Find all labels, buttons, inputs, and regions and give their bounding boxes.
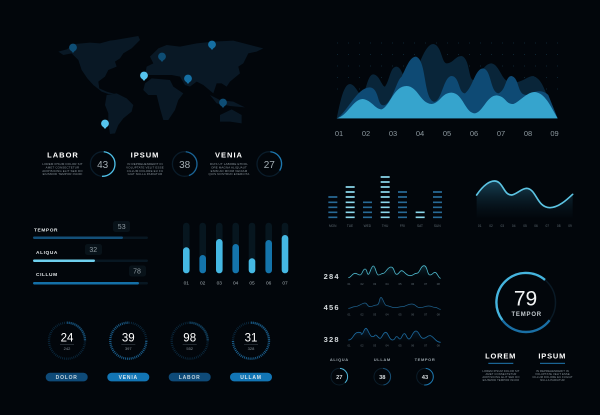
axis 456: 05 bbox=[398, 312, 402, 316]
lorem description: ADIPISICING ELIT SED DO bbox=[482, 375, 520, 379]
underline: lorem bbox=[488, 363, 513, 364]
panel: segmented equalizer chart bbox=[328, 177, 442, 228]
map landmasses bbox=[58, 36, 263, 134]
labor description: ADIPISICING ELIT SED DO bbox=[42, 169, 83, 173]
day labels: MON bbox=[329, 224, 337, 228]
bar labels: 07 bbox=[282, 281, 288, 287]
day labels: FRI bbox=[400, 224, 405, 228]
ring arc: dark bbox=[502, 320, 550, 332]
ipsum description bbox=[532, 369, 573, 382]
panel: world map bbox=[58, 36, 263, 134]
axis 328: 01 bbox=[347, 344, 351, 348]
bar labels: 03 bbox=[217, 281, 222, 287]
day labels bbox=[329, 224, 441, 228]
axis 284: 05 bbox=[398, 282, 402, 286]
dial value: 31 bbox=[245, 332, 257, 344]
panel: ipsum text bbox=[532, 352, 573, 382]
panel: lorem text bbox=[482, 352, 520, 382]
gauge: tempor 43: TEMPOR bbox=[415, 357, 435, 362]
line chart axis labels bbox=[478, 224, 572, 228]
bar labels bbox=[184, 281, 288, 287]
map pin: middle east bbox=[184, 75, 192, 84]
ipsum description: VOLUPTATE VELIT ESSE bbox=[535, 372, 570, 376]
panel: dial ullam bbox=[230, 323, 272, 381]
line chart axis labels: 02 bbox=[489, 224, 493, 228]
labor description: LOREM IPSUM DOLOR SIT bbox=[42, 162, 83, 166]
gauge: tempor 43 bbox=[415, 357, 435, 386]
x axis labels: 03 bbox=[389, 129, 397, 138]
ipsum description bbox=[126, 162, 164, 176]
ring value: 79 bbox=[514, 288, 537, 310]
pill: venia: VENIA bbox=[119, 375, 138, 381]
day labels: WED bbox=[364, 224, 372, 228]
wave 328 bbox=[348, 328, 441, 342]
bar: aliqua 32: 32 bbox=[89, 247, 97, 254]
value 456: 456 bbox=[324, 303, 340, 312]
panel: sparkline 456 bbox=[324, 297, 441, 316]
panel: layered area chart bbox=[335, 43, 559, 138]
axis 456: 06 bbox=[411, 312, 415, 316]
dial value: 39 bbox=[122, 332, 135, 344]
panel: vertical bar chart bbox=[183, 223, 288, 287]
x axis labels: 08 bbox=[524, 129, 532, 138]
value 328: 328 bbox=[324, 335, 340, 344]
bar: cillum 78: 78 bbox=[133, 268, 141, 276]
line chart axis labels: 08 bbox=[557, 224, 561, 228]
dial ticks bbox=[49, 323, 85, 359]
panel: dial dolor bbox=[46, 323, 88, 381]
panel: line chart bbox=[477, 181, 573, 228]
venia description: DUIS UT LABORE ETDOL bbox=[210, 162, 248, 166]
wave 284 bbox=[348, 266, 441, 278]
dial divider and subvalue: 397 bbox=[125, 346, 132, 351]
bar: tempor 53 bbox=[33, 221, 148, 239]
area layers bbox=[337, 44, 558, 118]
axis 456 bbox=[347, 312, 440, 316]
bar: cillum 78: CILLUM bbox=[36, 272, 58, 278]
gauge: ullam 38 bbox=[373, 357, 391, 386]
bar: cillum 78 bbox=[33, 266, 148, 284]
dial ticks bbox=[172, 323, 208, 359]
axis 284: 04 bbox=[385, 282, 389, 286]
bar fills bbox=[183, 235, 288, 273]
gauge: aliqua 27: ALIQUA bbox=[330, 357, 349, 362]
panel: large ring gauge bbox=[496, 273, 556, 332]
ipsum description: IN REPREHENDERIT IN bbox=[127, 162, 163, 166]
wave 456 bbox=[348, 297, 441, 309]
axis 456: 08 bbox=[437, 312, 440, 316]
bar labels: 05 bbox=[249, 281, 255, 287]
bar: tempor 53: 53 bbox=[118, 224, 126, 231]
venia description: ENIM AD MINIM VENIAM bbox=[211, 169, 248, 173]
map pin: indonesia bbox=[219, 99, 227, 108]
labor description bbox=[42, 162, 83, 176]
x axis labels bbox=[335, 129, 559, 138]
dial divider and subvalue: 328 bbox=[248, 346, 255, 351]
gauge: aliqua 27 bbox=[330, 357, 349, 386]
panel: dial labor bbox=[169, 323, 211, 381]
map pin: russia bbox=[208, 41, 216, 50]
line chart axis labels: 09 bbox=[568, 224, 572, 228]
axis 456: 07 bbox=[424, 312, 428, 316]
bar: tempor 53: TEMPOR bbox=[34, 228, 58, 234]
line chart axis labels: 05 bbox=[523, 224, 527, 228]
ring gauge: 27: 27 bbox=[264, 160, 275, 171]
axis 328: 03 bbox=[373, 344, 377, 348]
ring track bbox=[496, 273, 556, 332]
axis 284: 03 bbox=[373, 282, 377, 286]
panel: horizontal progress bars bbox=[33, 221, 148, 284]
gauge: tempor 43: 43 bbox=[422, 375, 429, 381]
x axis labels: 04 bbox=[416, 129, 424, 138]
line with area fill bbox=[477, 181, 573, 218]
dial divider and subvalue: 242 bbox=[64, 346, 71, 351]
dial divider and subvalue: 552 bbox=[186, 346, 194, 351]
panel: sparkline 328 bbox=[324, 328, 441, 348]
axis 456: 02 bbox=[360, 312, 364, 316]
axis 328: 04 bbox=[385, 344, 389, 348]
ring gauge: 43: 43 bbox=[97, 160, 109, 171]
x axis labels: 06 bbox=[470, 129, 478, 138]
pill: ullam: ULLAM bbox=[240, 375, 262, 381]
venia description: ORE MAGNA ALIQUAUT bbox=[211, 166, 247, 170]
day labels: TUE bbox=[347, 224, 353, 228]
ring arc: light bbox=[496, 273, 545, 320]
axis 328: 05 bbox=[398, 344, 402, 348]
day labels: SAT bbox=[417, 224, 423, 228]
panel: small ring gauges bbox=[330, 357, 435, 386]
dial value: 98 bbox=[183, 332, 196, 344]
lorem description: AMET CONSECTETUR bbox=[485, 372, 517, 376]
ring label: TEMPOR bbox=[511, 312, 542, 318]
ipsum description: CILLUM DOLORE EU FUGIAT bbox=[532, 375, 573, 379]
lorem description: LOREM IPSUM DOLOR SIT bbox=[482, 369, 520, 373]
axis 284: 01 bbox=[347, 282, 351, 286]
axis 328: 02 bbox=[360, 344, 364, 348]
heading: lorem: LOREM bbox=[485, 352, 516, 360]
gauge: ullam 38: ULLAM bbox=[374, 357, 391, 362]
heading: ipsum: IPSUM bbox=[131, 150, 159, 160]
labor description: AMET CONSECTETUR bbox=[46, 166, 79, 170]
venia description bbox=[208, 162, 250, 176]
ipsum description: CILLUM DOLORE EU FU bbox=[127, 169, 163, 173]
gauge: ullam 38: 38 bbox=[379, 375, 386, 381]
line chart axis labels: 06 bbox=[534, 224, 538, 228]
ipsum description: NULLA PARIATUR bbox=[540, 378, 565, 382]
dot grid bbox=[337, 43, 558, 89]
gauge: aliqua 27: 27 bbox=[336, 375, 343, 381]
panel: ipsum stat bbox=[126, 150, 198, 177]
dial ticks bbox=[110, 323, 146, 359]
ipsum description: GIAT NULLA PARIATUR bbox=[128, 172, 162, 176]
axis 284 bbox=[347, 282, 440, 286]
ring gauge: 38: 38 bbox=[179, 160, 191, 171]
equalizer bars bbox=[328, 177, 442, 217]
x axis labels: 05 bbox=[443, 129, 451, 138]
axis 456: 01 bbox=[347, 312, 351, 316]
panel: dial venia bbox=[107, 323, 149, 381]
heading: ipsum: IPSUM bbox=[538, 352, 566, 360]
map pin: atlantic bbox=[140, 72, 148, 81]
bar labels: 01 bbox=[184, 281, 189, 287]
axis 284: 06 bbox=[411, 282, 415, 286]
axis 284: 02 bbox=[360, 282, 364, 286]
line chart axis labels: 01 bbox=[478, 224, 482, 228]
line chart axis labels: 04 bbox=[512, 224, 516, 228]
pill: labor: LABOR bbox=[179, 375, 201, 381]
axis 284: 08 bbox=[437, 282, 440, 286]
bar labels: 04 bbox=[233, 281, 239, 287]
panel: sparkline 284 bbox=[324, 266, 441, 286]
x axis labels: 02 bbox=[362, 129, 370, 138]
line chart axis labels: 07 bbox=[546, 224, 549, 228]
dial value: 24 bbox=[61, 332, 74, 344]
axis 328: 08 bbox=[437, 344, 440, 348]
axis 328: 06 bbox=[411, 344, 415, 348]
axis 284: 07 bbox=[424, 282, 428, 286]
x axis labels: 09 bbox=[550, 129, 559, 138]
axis 328: 07 bbox=[424, 344, 428, 348]
panel: labor stat bbox=[42, 150, 116, 177]
bar tracks bbox=[183, 223, 288, 273]
heading: venia: VENIA bbox=[215, 150, 243, 160]
axis 456: 03 bbox=[373, 312, 377, 316]
bar: aliqua 32 bbox=[33, 244, 148, 262]
lorem description bbox=[482, 369, 520, 382]
bar labels: 06 bbox=[266, 281, 272, 287]
heading: labor: LABOR bbox=[47, 150, 79, 160]
labor description: EIUSMOD TEMPOR INCIDI bbox=[43, 172, 82, 176]
dial ticks bbox=[233, 323, 269, 359]
ipsum description: IN REPREHENDERIT IN bbox=[536, 369, 569, 373]
value 284: 284 bbox=[324, 272, 340, 281]
bar: aliqua 32: ALIQUA bbox=[36, 250, 58, 256]
day labels: SUN bbox=[434, 224, 441, 228]
map pin: north america bbox=[69, 44, 77, 53]
ipsum description: VOLUPTATE VELIT ESSE bbox=[126, 166, 164, 170]
panel: venia stat bbox=[208, 150, 283, 177]
bar labels: 02 bbox=[200, 281, 206, 287]
day labels: THU bbox=[382, 224, 389, 228]
map pin: europe bbox=[158, 53, 166, 62]
x axis labels: 01 bbox=[335, 129, 343, 138]
line chart axis labels: 03 bbox=[501, 224, 504, 228]
underline: ipsum bbox=[540, 363, 565, 364]
map pin: south america bbox=[101, 120, 109, 129]
axis 456: 04 bbox=[385, 312, 389, 316]
x axis labels: 07 bbox=[497, 129, 505, 138]
pill: dolor: DOLOR bbox=[56, 375, 78, 381]
lorem description: EIUSMOD TEMPOR INCIDI bbox=[483, 378, 519, 382]
venia description: QUIS NOSTRUD EXERCITA bbox=[208, 172, 250, 176]
axis 328 bbox=[347, 344, 440, 348]
